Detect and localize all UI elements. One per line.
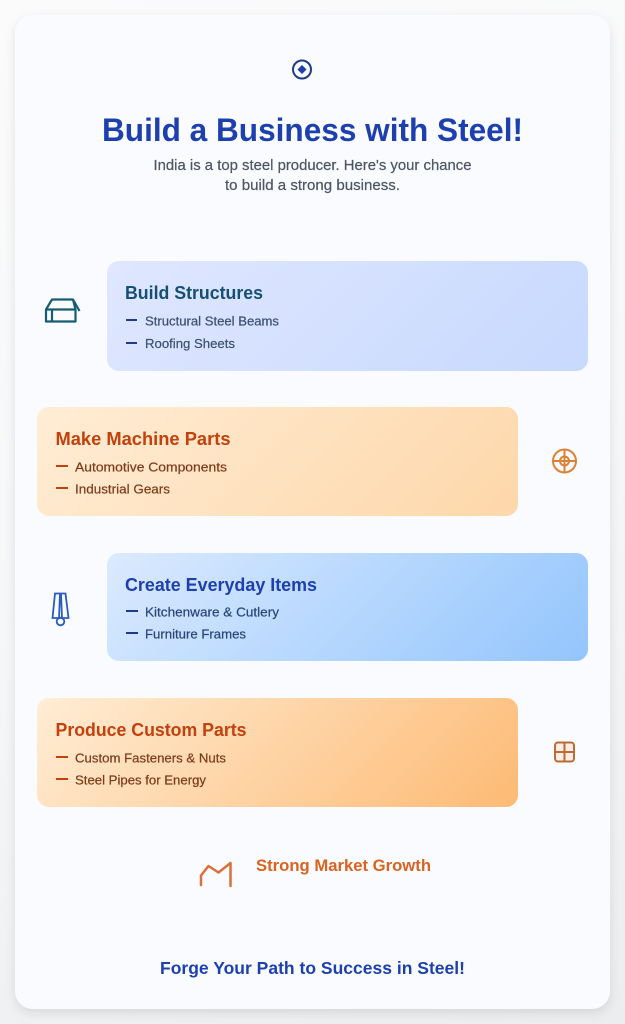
list: make machine parts: Automotive Components (75, 460, 227, 474)
panel: produce custom parts (37, 698, 518, 807)
heading: create everyday items: Create Everyday Items (125, 575, 317, 595)
panel: create everyday items (107, 553, 588, 661)
title: Build a Business with Steel! (102, 112, 523, 148)
list: produce custom parts: Steel Pipes for Energy (75, 774, 207, 788)
label: strong market growth: Strong Market Growth (256, 857, 431, 875)
list: build structures (126, 314, 279, 351)
list: create everyday items (126, 606, 280, 642)
heading: make machine parts: Make Machine Parts (56, 429, 230, 449)
panel: make machine parts (37, 407, 518, 516)
icon: utensil (52, 594, 68, 625)
subtitle: India is a top steel producer. Here's your chance (154, 158, 472, 174)
list: make machine parts: Industrial Gears (75, 482, 170, 496)
icon: market growth line (201, 863, 230, 886)
list: produce custom parts (56, 752, 226, 788)
icon: grid (555, 742, 574, 762)
list: build structures: Structural Steel Beams (145, 314, 279, 328)
subtitle (154, 158, 472, 194)
heading: produce custom parts: Produce Custom Parts (56, 720, 246, 740)
list: create everyday items: Kitchenware & Cutlery (145, 606, 280, 620)
panel: build structures (107, 261, 588, 371)
icon: gear target (553, 450, 576, 472)
list: create everyday items: Furniture Frames (145, 628, 246, 642)
footer tagline: Forge Your Path to Success in Steel! (160, 958, 465, 978)
subtitle: to build a strong business. (225, 178, 400, 194)
icon: header target (293, 60, 311, 78)
list: produce custom parts: Custom Fasteners & Nuts (75, 752, 226, 766)
icon: box structure (46, 300, 80, 322)
heading: build structures: Build Structures (125, 283, 263, 303)
list: make machine parts (56, 460, 227, 496)
list: build structures: Roofing Sheets (145, 337, 235, 351)
